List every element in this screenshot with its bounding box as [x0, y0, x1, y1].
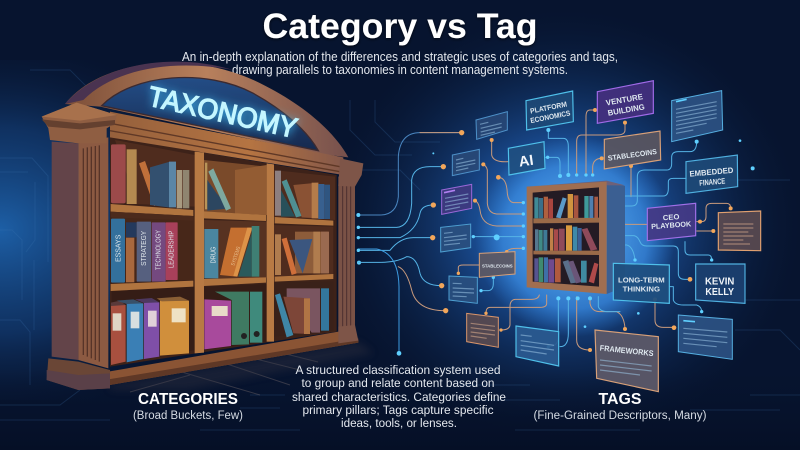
central bookshelf [527, 181, 625, 294]
tag: Embedded Finance: FINANCE [699, 176, 726, 188]
tag: Long-Term Thinking: THINKING [623, 284, 660, 293]
tag: Platform Economics: PLATFORM [529, 100, 568, 116]
tag: Frameworks: FRAMEWORKS [599, 344, 655, 358]
card: blank 3 [452, 149, 479, 176]
shelves and dividers [111, 152, 333, 353]
tag: Kevin Kelly: KEVIN [705, 276, 734, 287]
center description: ideas, tools, or lenses. [341, 416, 457, 430]
tag: CEO Playbook [647, 203, 696, 241]
sign: Taxonomy: TAXONOMY [145, 81, 300, 144]
card: blank 4 [441, 224, 471, 252]
plinth [108, 332, 358, 385]
book spine labels: SYSTEMS [230, 246, 242, 267]
book spine labels: STRATEGY [141, 231, 148, 266]
center description: A structured classification system used [296, 363, 500, 377]
subtitle [182, 50, 618, 77]
book spine labels: ESSAYS [115, 234, 122, 262]
title: Category vs Tag [262, 7, 538, 46]
tag: Frameworks [595, 330, 658, 392]
connector nodes blue [356, 128, 755, 356]
center description: primary pillars; Tags capture specific [302, 403, 494, 417]
center glow [475, 137, 675, 337]
tag network [356, 81, 761, 392]
tags label: TAGS [598, 391, 642, 408]
tag: Stablecoins: STABLECOINS [607, 147, 657, 163]
subtitle: drawing parallels to taxonomies in content management systems. [232, 63, 568, 77]
sign: Taxonomy: TAXONOMY [145, 81, 300, 144]
card: blank 7 [678, 315, 732, 359]
card: blank 2 [672, 91, 723, 142]
right pillar [338, 158, 363, 343]
mini books [534, 194, 598, 283]
tag: small Stablecoins: STABLECOINS [482, 264, 513, 269]
card: blank 6 [516, 326, 559, 366]
tag: Platform Economics [526, 91, 573, 130]
tag: Kevin Kelly [696, 264, 745, 303]
tag: Kevin Kelly: KELLY [705, 287, 734, 298]
left pillar [42, 103, 117, 390]
left panel connector origin [357, 261, 361, 265]
center description: shared characteristics. Categories define [292, 390, 506, 404]
tag: Platform Economics: ECONOMICS [529, 108, 571, 125]
category label [133, 391, 243, 422]
tag: AI [508, 142, 545, 175]
card: blank 5 [449, 276, 477, 303]
arch [65, 62, 348, 157]
subtitle: An in-depth explanation of the differences and strategic uses of categories and tags, [182, 50, 618, 64]
tag: Embedded Finance [686, 155, 738, 193]
tag: Stablecoins [604, 131, 661, 169]
tags label: (Fine-Grained Descriptors, Many) [534, 410, 707, 422]
tag: small Stablecoins [479, 252, 515, 277]
books row 2 [111, 219, 329, 283]
book spine labels: DRUG [210, 247, 217, 263]
card: purple blank [442, 184, 472, 214]
tag: Long-Term Thinking: LONG-TERM [618, 276, 665, 285]
books row 1 [111, 144, 330, 219]
tag: Long-Term Thinking [613, 263, 669, 303]
tag: CEO Playbook: PLAYBOOK [651, 219, 692, 231]
connectors [358, 110, 731, 353]
card: orange blank [718, 211, 761, 251]
book spine labels [115, 230, 242, 270]
tag: CEO Playbook: CEO [663, 212, 680, 222]
card: blank 1 [476, 112, 507, 139]
floor shadow [110, 342, 373, 390]
tag: AI: AI [518, 153, 535, 171]
center description [292, 363, 506, 430]
card: orange blank 2 [467, 313, 498, 347]
category label: (Broad Buckets, Few) [133, 410, 243, 422]
shelf interior [110, 137, 337, 367]
tags label [534, 391, 707, 422]
bookshelf: categories [42, 62, 373, 390]
tag: Venture Building: BUILDING [607, 102, 645, 118]
tag: Embedded Finance: EMBEDDED [689, 166, 734, 179]
tag: Venture Building [597, 81, 653, 123]
category label: CATEGORIES [138, 391, 238, 408]
center description: to group and relate content based on [302, 376, 494, 390]
connector nodes [430, 108, 733, 352]
tag: Venture Building: VENTURE [605, 92, 644, 108]
top beam [110, 112, 343, 175]
book spine labels: TECHNOLOGY [155, 230, 162, 270]
book spine labels: LEADERSHIP [168, 230, 175, 268]
binders row 3 [111, 288, 329, 365]
